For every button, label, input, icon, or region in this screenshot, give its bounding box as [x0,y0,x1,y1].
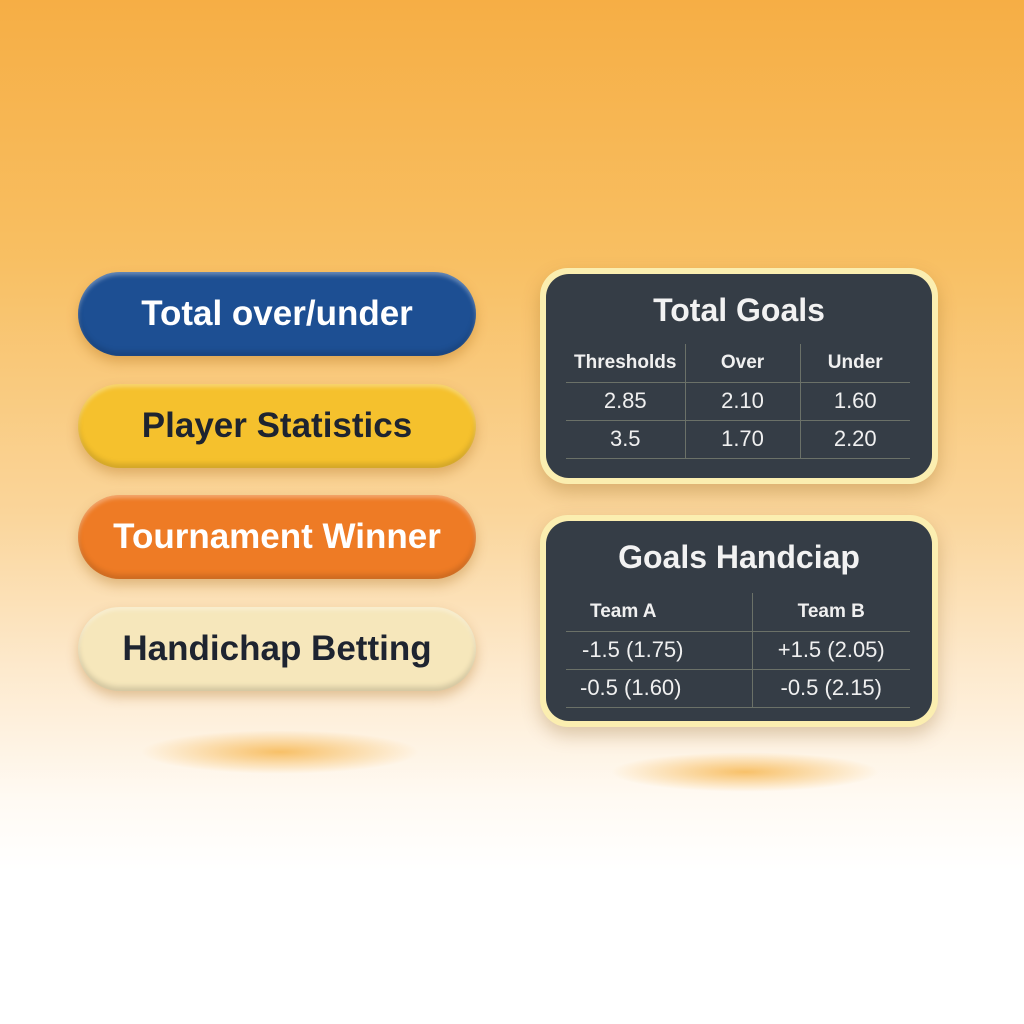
button: Handichap Betting: Handichap Betting [122,629,432,668]
table: total goals: Over [721,352,764,373]
table: handicap: -1.5 (1.75) [582,637,684,662]
button: Player Statistics: Player Statistics [142,406,412,445]
table: total goals: 3.5 [610,426,641,451]
button: Total over/under [78,272,476,356]
table: handicap: -0.5 (1.60) [580,675,682,700]
table: total goals: 2.20 [834,426,877,451]
table: handicap [566,593,910,708]
table: total goals: Thresholds [574,352,676,373]
table: total goals: 2.10 [721,388,764,413]
heading: Goals Handciap: Goals Handciap [618,539,860,575]
table: total goals: Under [828,352,883,373]
panel: Total Goals [540,268,938,484]
table: handicap: -0.5 (2.15) [780,675,882,700]
button: Tournament Winner: Tournament Winner [113,517,441,556]
table: handicap: +1.5 (2.05) [778,637,885,662]
button: Tournament Winner [78,495,476,579]
table: total goals: 2.85 [604,388,647,413]
table: total goals: 1.60 [834,388,877,413]
heading: Total Goals: Total Goals [653,292,825,328]
table: total goals: 1.70 [721,426,764,451]
table: handicap: Team B [798,601,865,622]
glow: under tables [610,752,880,792]
panel: Goals Handicap [540,515,938,727]
button: Player Statistics [78,384,476,468]
table: total goals [566,344,910,459]
table: handicap: Team A [590,601,657,622]
button: Handichap Betting [78,607,476,691]
glow: under buttons [140,730,420,774]
button: Total over/under: Total over/under [141,294,413,333]
